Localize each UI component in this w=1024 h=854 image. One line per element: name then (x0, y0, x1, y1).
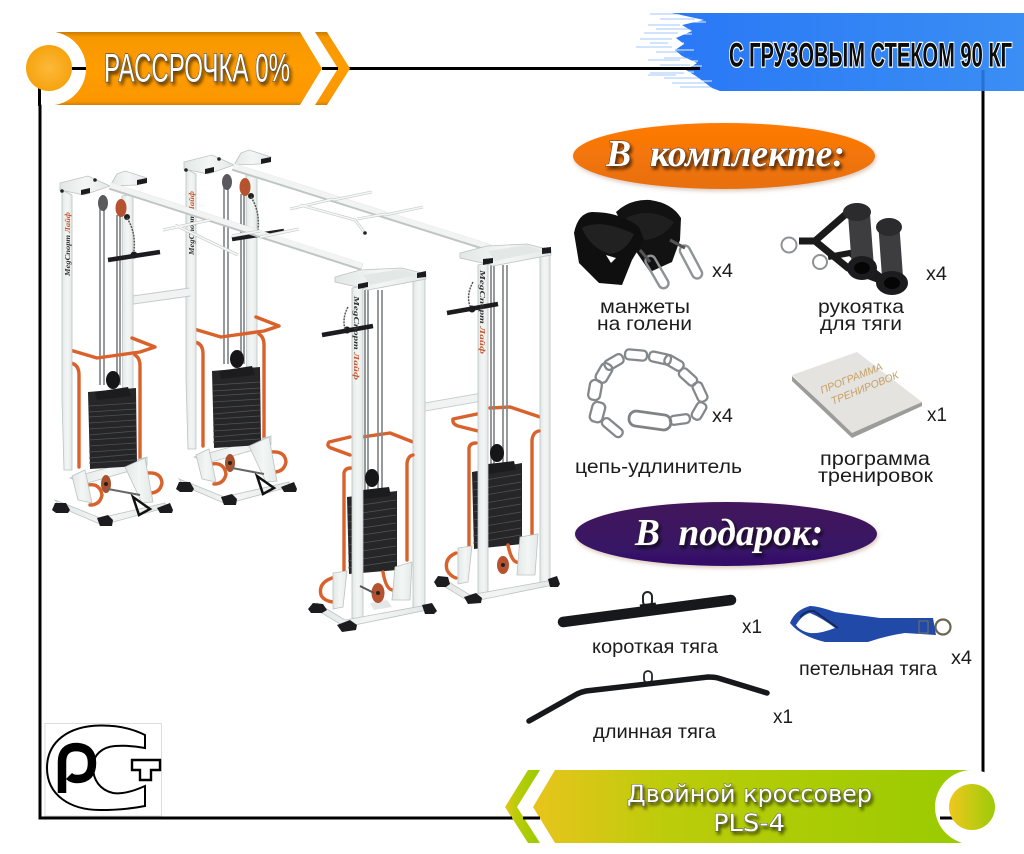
count: cuffs: x4 (712, 260, 733, 282)
label: cuffs: манжеты (600, 296, 690, 318)
machine: tower C (308, 268, 437, 632)
label: handles: рукоятка (818, 296, 904, 318)
label: cuffs: на голени (597, 313, 692, 335)
label: chain: цепь-удлинитель (575, 456, 742, 478)
label: long bar: длинная тяга (593, 721, 716, 743)
count: short bar: x1 (742, 616, 762, 638)
banner: product name (500, 770, 1009, 844)
item: ankle cuffs (574, 200, 704, 290)
front beam (110, 185, 362, 267)
brand label on tower A: MegСпорт Лайф (63, 211, 72, 277)
count: loop strap: x4 (951, 647, 972, 669)
certification logo: RST (45, 724, 162, 816)
tower B (176, 150, 297, 505)
heading pill: gift (575, 502, 877, 566)
banner: weight stack (636, 13, 1024, 91)
count: book: x1 (927, 404, 947, 426)
label: short bar: короткая тяга (592, 636, 718, 658)
brand label on tower B: MegСпорт Лайф (187, 190, 196, 256)
book cover text: ТРЕНИРОВОК (829, 369, 901, 408)
brand label on tower D: MegСпорт Лайф (478, 269, 487, 355)
item: chain (587, 349, 709, 439)
heading text: in the set: В комплекте: (605, 133, 845, 175)
rear beam (233, 166, 490, 248)
banner text: product name: PLS-4 (713, 809, 785, 837)
banner: rassrochka (12, 32, 350, 106)
label: handles: для тяги (820, 313, 902, 335)
label: loop strap: петельная тяга (799, 658, 937, 680)
item: handles (782, 203, 908, 295)
machine: tower A (52, 171, 190, 526)
count: chain: x4 (712, 405, 733, 427)
brand label on tower C: MegСпорт Лайф (352, 295, 361, 381)
item: short bar (563, 592, 731, 622)
count: handles: x4 (926, 263, 947, 285)
count: long bar: x1 (773, 706, 793, 728)
machine: rear tower right-hand pair (176, 150, 490, 505)
heading pill: in the set (573, 123, 875, 189)
item: training book (792, 352, 922, 438)
banner text: rassrochka: РАССРОЧКА 0% (104, 46, 290, 90)
heading text: gift: В подарок: (634, 512, 823, 554)
banner text: product name: Двойной кроссовер (627, 780, 872, 808)
label: book: тренировок (818, 465, 934, 487)
book cover text: ПРОГРАММА (819, 361, 884, 397)
item: loop strap (790, 606, 950, 642)
item: long bar (529, 671, 767, 721)
label: book: программа (820, 448, 930, 470)
machine: tower D (425, 244, 560, 604)
